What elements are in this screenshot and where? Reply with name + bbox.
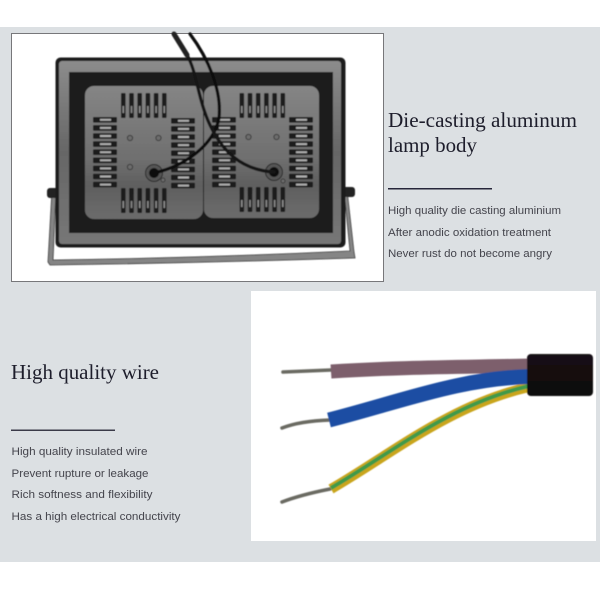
text block: wire features: High quality insulated wire [12, 446, 148, 458]
text block: lamp body features: High quality die casting aluminium [388, 205, 561, 217]
screws [127, 134, 285, 183]
heading line 2: lamp body [388, 133, 477, 157]
heading: high quality wire: High quality wire [11, 360, 159, 384]
panel: wire photo [251, 291, 596, 541]
left heat-sink plate [85, 86, 203, 219]
wire tips [282, 370, 331, 502]
lamp housing [56, 58, 346, 248]
cable glands [146, 164, 282, 182]
mounting bracket [48, 190, 355, 265]
blue wire [329, 376, 531, 420]
green-yellow wire [331, 386, 529, 489]
text block: lamp body features: After anodic oxidation treatment [388, 227, 551, 239]
power cables [154, 34, 274, 173]
text block: wire features [12, 446, 181, 523]
text block: wire features: Has a high electrical conductivity [12, 511, 181, 523]
text block: lamp body features [388, 205, 561, 260]
divider [11, 430, 115, 431]
icon: lamp body rear view [47, 34, 355, 265]
black jacket [527, 354, 593, 396]
text block: lamp body features: Never rust do not become angry [388, 248, 553, 260]
right heat-sink plate [204, 86, 319, 218]
purple wire [331, 366, 530, 372]
text block: wire features: Rich softness and flexibility [12, 489, 153, 501]
text block: wire features: Prevent rupture or leakage [12, 468, 148, 480]
bracket pivots [47, 187, 355, 198]
panel: lamp photo [12, 34, 384, 282]
divider [388, 188, 492, 190]
vent slots [93, 93, 313, 213]
icon: three-core cable [282, 354, 593, 502]
heading: die-casting aluminum lamp body: Die-casting aluminum [388, 108, 577, 132]
